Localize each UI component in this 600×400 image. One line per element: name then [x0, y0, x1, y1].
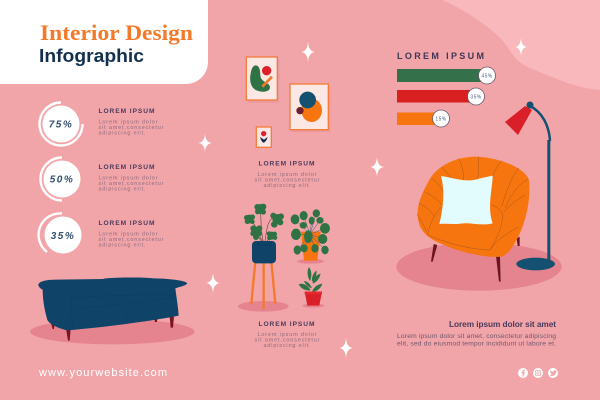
text block: adipiscing elit.	[98, 242, 146, 248]
text block: sit amet,consectetur	[98, 237, 164, 243]
background blob top right	[442, 0, 600, 90]
text block: Lorem ipsum dolor	[98, 120, 158, 126]
text block: adipiscing elit.	[98, 130, 146, 136]
stat: 35%: 35%	[51, 231, 75, 242]
title: Interior Design: Interior Design	[40, 20, 193, 45]
text block: adipiscing elit.	[98, 186, 146, 192]
social icons	[518, 368, 558, 378]
armchair	[417, 157, 529, 282]
stat: 50%: 50%	[50, 174, 74, 186]
frame 1	[246, 57, 279, 103]
frames illustration	[246, 57, 330, 147]
text block: Lorem ipsum dolor	[98, 232, 158, 238]
frames caption: Lorem ipsum dolor	[258, 172, 317, 178]
chair caption: Lorem ipsum dolor sit amet, consectetur adipiscing	[397, 333, 556, 340]
sofa illustration	[30, 278, 195, 344]
bar 35%: 35%	[470, 94, 482, 100]
plants caption: adipiscing elit.	[264, 343, 311, 349]
text block	[98, 220, 164, 248]
lamp shade and arm	[505, 102, 550, 141]
chair caption	[397, 319, 556, 348]
stat: 75%	[40, 102, 164, 146]
frames caption	[254, 160, 320, 189]
plant on stand	[238, 204, 289, 312]
plants caption: sit amet,consectetur	[254, 338, 320, 344]
text block: LOREM IPSUM	[98, 108, 156, 115]
plants illustration	[238, 204, 330, 312]
pillow	[439, 176, 493, 224]
text block: sit amet,consectetur	[98, 181, 164, 187]
plant in red pot	[299, 267, 324, 308]
frames caption: adipiscing elit.	[264, 183, 311, 189]
stat: 50%	[40, 158, 164, 200]
bar chart	[397, 51, 496, 127]
plants caption: LOREM IPSUM	[258, 321, 316, 328]
stat: 75%: 75%	[49, 120, 73, 130]
frames caption: sit amet,consectetur	[254, 178, 320, 184]
sparkles	[198, 38, 527, 358]
text block: Lorem ipsum dolor	[98, 176, 158, 182]
lamp	[516, 140, 555, 270]
frame 3	[256, 127, 271, 147]
text block	[98, 164, 164, 192]
text block	[98, 108, 164, 136]
plant in orange pot	[291, 209, 330, 264]
plants caption: Lorem ipsum dolor	[258, 332, 317, 338]
text block: LOREM IPSUM	[98, 164, 156, 171]
text block: LOREM IPSUM	[98, 220, 156, 227]
frame 2	[290, 84, 330, 132]
stat: 35%	[39, 213, 164, 254]
title: Infographic: Infographic	[39, 45, 144, 66]
chair caption: Lorem ipsum dolor sit amet	[449, 319, 556, 329]
chair caption: elit, sed do eiusmod tempor incididunt ut labore et.	[397, 340, 556, 348]
website: www.yourwebsite.com	[38, 367, 167, 379]
frames caption: LOREM IPSUM	[258, 160, 316, 168]
text block: sit amet,consectetur	[98, 125, 164, 131]
chart heading: LOREM IPSUM	[397, 51, 484, 61]
armchair and lamp illustration	[396, 140, 562, 291]
plants caption	[254, 321, 320, 349]
bar 45%: 45%	[481, 73, 493, 79]
title panel	[0, 0, 208, 84]
bar 15%: 15%	[435, 116, 447, 122]
